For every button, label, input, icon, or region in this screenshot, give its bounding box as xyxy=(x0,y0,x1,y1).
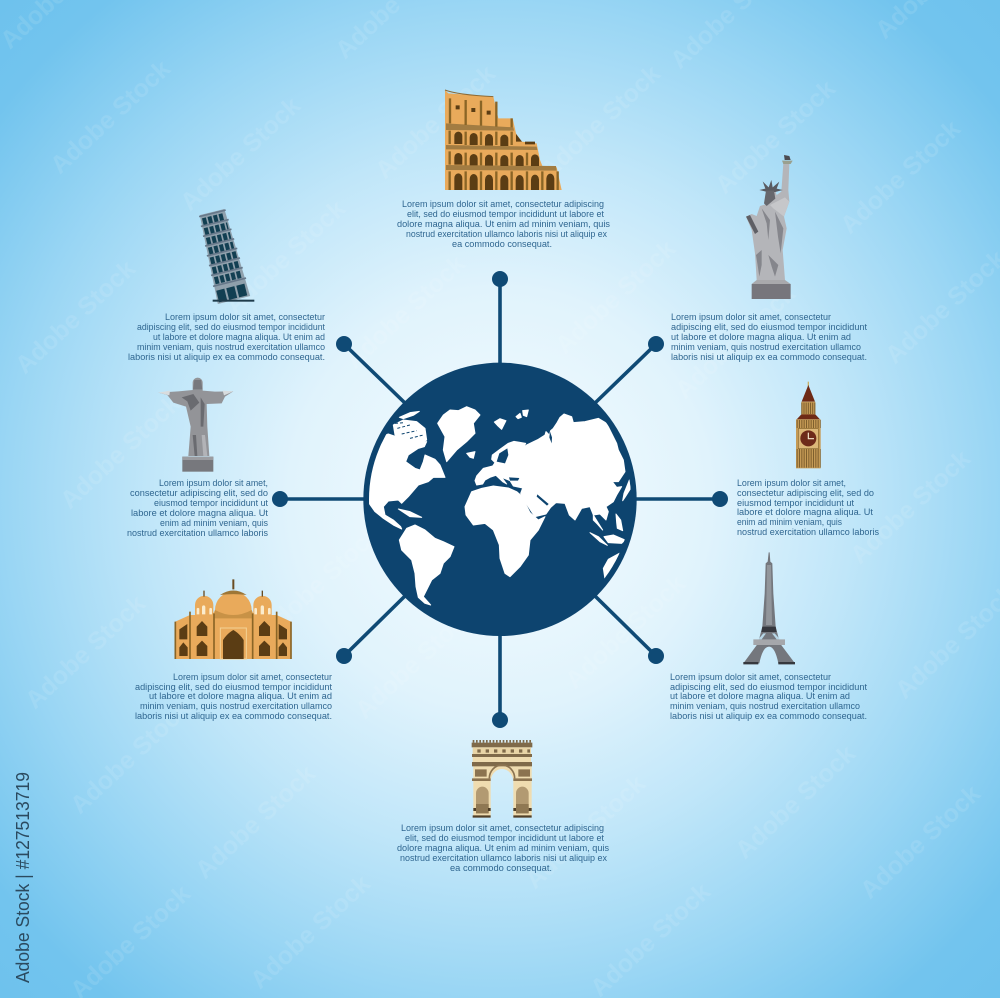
text: taj mahal xyxy=(135,672,332,721)
text: colosseum xyxy=(397,199,611,249)
icon: colosseum xyxy=(445,90,562,190)
icon: statue of liberty xyxy=(746,155,793,299)
pillars xyxy=(450,131,558,190)
text: christ xyxy=(127,478,269,538)
text: colosseum: elit, sed do eiusmod tempor incididunt ut labore et xyxy=(407,209,604,219)
text: colosseum: dolore magna aliqua. Ut enim ad minim veniam, quis xyxy=(397,219,611,229)
text: eiffel tower: Lorem ipsum dolor sit amet, consectetur xyxy=(670,672,831,682)
watermarks: Adobe Stock xyxy=(710,75,841,199)
watermarks: Adobe Stock xyxy=(730,740,861,864)
text: eiffel tower xyxy=(670,672,867,721)
text: eiffel tower: minim veniam, quis nostrud exercitation ullamco xyxy=(670,701,860,711)
arctic channels xyxy=(395,423,423,438)
text: arc de triomphe: dolore magna aliqua. Ut enim ad minim veniam, quis xyxy=(397,843,609,853)
watermarks: Adobe Stock xyxy=(255,520,386,644)
text: statue of liberty: ut labore et dolore magna aliqua. Ut enim ad xyxy=(671,332,851,342)
text: arc de triomphe xyxy=(397,823,609,873)
watermarks: Adobe Stock xyxy=(535,60,666,184)
text: big ben: consectetur adipiscing elit, sed do xyxy=(737,488,874,498)
text: taj mahal: adipiscing elit, sed do eiusmod tempor incididunt xyxy=(135,682,332,692)
text: eiffel tower: adipiscing elit, sed do eiusmod tempor incididunt xyxy=(670,682,867,692)
text: statue of liberty: adipiscing elit, sed do eiusmod tempor incididunt xyxy=(671,322,867,332)
text: christ: eiusmod tempor incididunt ut xyxy=(154,498,268,508)
south america xyxy=(399,525,454,605)
text: colosseum: nostrud exercitation ullamco laboris nisi ut aliquip ex xyxy=(406,229,607,239)
text: arc de triomphe: elit, sed do eiusmod tempor incididunt ut labore et xyxy=(405,833,604,843)
text: christ: enim ad minim veniam, quis xyxy=(160,518,268,528)
text: arc de triomphe: ea commodo consequat. xyxy=(450,863,552,873)
text: christ: nostrud exercitation ullamco laboris xyxy=(127,528,268,538)
stock id label: Adobe Stock | #127513719 xyxy=(13,772,33,983)
icon: eiffel tower xyxy=(743,552,795,664)
icon: christ the redeemer xyxy=(158,378,233,472)
greenland xyxy=(438,407,480,462)
inland seas xyxy=(497,432,552,506)
text: pisa: Lorem ipsum dolor sit amet, consectetur xyxy=(165,312,325,322)
text: big ben: nostrud exercitation ullamco laboris xyxy=(737,527,879,537)
text: eiffel tower: laboris nisi ut aliquip ex ea commodo consequat. xyxy=(670,711,867,721)
text: colosseum: ea commodo consequat. xyxy=(452,239,552,249)
watermarks: Adobe Stock xyxy=(190,760,321,884)
text: eiffel tower: ut labore et dolore magna aliqua. Ut enim ad xyxy=(670,691,850,701)
text: arc de triomphe: Lorem ipsum dolor sit amet, consectetur adipiscing xyxy=(401,823,604,833)
icon: big ben xyxy=(796,382,821,468)
watermarks: Adobe Stock xyxy=(65,695,196,819)
arches xyxy=(454,132,554,190)
text: pisa xyxy=(128,312,325,362)
watermarks: Adobe Stock xyxy=(520,770,651,894)
watermarks: Adobe Stock xyxy=(45,55,176,179)
watermarks: Adobe Stock xyxy=(670,280,801,404)
text: big ben: eiusmod tempor incididunt ut xyxy=(737,498,855,508)
top columns xyxy=(450,98,512,127)
text: statue of liberty: minim veniam, quis nostrud exercitation ullamco xyxy=(671,342,861,352)
text: taj mahal: Lorem ipsum dolor sit amet, consectetur xyxy=(173,672,332,682)
watermarks: Adobe Stock xyxy=(835,115,966,239)
watermarks: Adobe Stock xyxy=(370,60,501,184)
watermarks: Adobe Stock xyxy=(855,780,986,904)
franz josef land xyxy=(516,410,528,419)
icon: leaning tower of pisa xyxy=(196,208,254,304)
text: pisa: adipiscing elit, sed do eiusmod tempor incididunt xyxy=(137,322,325,332)
watermarks: Adobe Stock xyxy=(550,235,681,359)
text: christ: Lorem ipsum dolor sit amet, xyxy=(159,478,268,488)
text: big ben xyxy=(737,478,879,537)
text: taj mahal: minim veniam, quis nostrud exercitation ullamco xyxy=(140,701,332,711)
text: pisa: minim veniam, quis nostrud exercitation ullamco xyxy=(137,342,325,352)
watermarks: Adobe Stock xyxy=(845,445,976,569)
eurasia xyxy=(475,414,625,520)
watermarks: Adobe Stock xyxy=(20,590,151,714)
text: statue of liberty: laboris nisi ut aliquip ex ea commodo consequat. xyxy=(671,352,867,362)
arctic islands xyxy=(393,411,427,445)
watermarks: Adobe Stock xyxy=(560,570,691,694)
spokes and end dots xyxy=(272,271,728,728)
text: pisa: laboris nisi ut aliquip ex ea commodo consequat. xyxy=(128,352,325,362)
watermarks: Adobe Stock xyxy=(55,390,186,514)
watermarks: Adobe Stock xyxy=(350,600,481,724)
icon: taj mahal xyxy=(175,579,291,659)
text: big ben: labore et dolore magna aliqua. Ut xyxy=(737,507,874,517)
icon: arc de triomphe xyxy=(472,741,532,818)
text: pisa: ut labore et dolore magna aliqua. Ut enim ad xyxy=(153,332,325,342)
globe xyxy=(363,363,637,636)
watermarks: Adobe Stock xyxy=(10,255,141,379)
watermarks: Adobe Stock xyxy=(220,195,351,319)
watermarks: Adobe Stock xyxy=(245,870,376,994)
windows xyxy=(456,105,491,115)
text: christ: labore et dolore magna aliqua. Ut xyxy=(131,508,269,518)
north america xyxy=(367,434,445,529)
text: arc de triomphe: nostrud exercitation ullamco laboris nisi ut aliquip ex xyxy=(400,853,607,863)
africa xyxy=(465,486,545,577)
text: christ: consectetur adipiscing elit, sed do xyxy=(130,488,268,498)
iceland xyxy=(467,452,475,458)
watermarks: Adobe Stock xyxy=(175,92,306,216)
text: big ben: Lorem ipsum dolor sit amet, xyxy=(737,478,846,488)
svalbard xyxy=(494,419,506,429)
text: statue of liberty: Lorem ipsum dolor sit amet, consectetur xyxy=(671,312,831,322)
text: statue of liberty xyxy=(671,312,867,362)
text: taj mahal: ut labore et dolore magna aliqua. Ut enim ad xyxy=(149,691,332,701)
islands xyxy=(398,480,631,579)
text: taj mahal: laboris nisi ut aliquip ex ea commodo consequat. xyxy=(135,711,332,721)
watermarks: Adobe Stock xyxy=(340,250,471,374)
text: colosseum: Lorem ipsum dolor sit amet, consectetur adipiscing xyxy=(402,199,604,209)
text: big ben: enim ad minim veniam, quis xyxy=(737,517,842,527)
